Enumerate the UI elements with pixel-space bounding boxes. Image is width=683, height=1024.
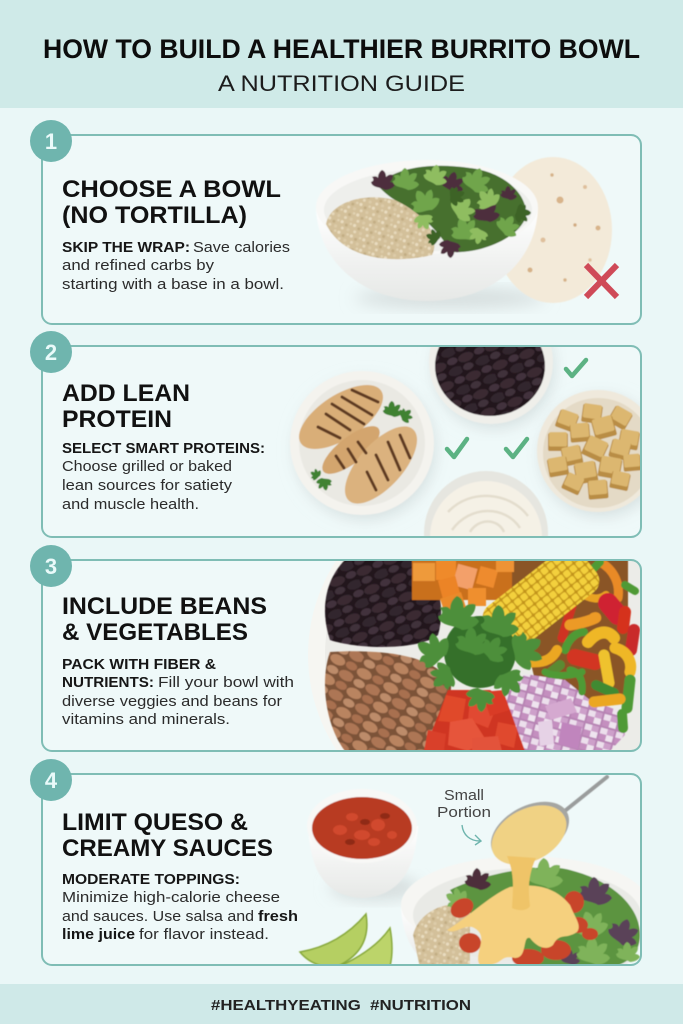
sour cream bowl (424, 471, 548, 536)
red x mark (586, 265, 617, 297)
panel 1: choose a bowl (30, 120, 641, 324)
cilantro (444, 616, 516, 688)
small portion label (438, 789, 490, 817)
heading 3: & VEGETABLES (62, 619, 248, 646)
heading 4 (62, 809, 273, 862)
white bowl (316, 160, 538, 301)
queso pool (447, 886, 579, 965)
badge 2 (30, 331, 72, 373)
heading 4: LIMIT QUESO & (62, 809, 248, 836)
body text 3: PACK WITH FIBER & (62, 657, 217, 673)
heading 3: INCLUDE BEANS (62, 593, 267, 620)
illustration: salsa, lime, queso bowl (300, 777, 649, 970)
body text 1: SKIP THE WRAP: (62, 240, 190, 256)
heading 1: CHOOSE A BOWL (62, 176, 281, 203)
badge 4 (30, 759, 72, 801)
body text 1: Save calories (193, 240, 290, 256)
heading 2: ADD LEAN (62, 380, 190, 407)
body text 1: and refined carbs by (62, 258, 215, 274)
badge 4: 4 (45, 768, 58, 793)
badge 3 (30, 545, 72, 587)
body text 3 (62, 657, 294, 728)
body text 3: Fill your bowl with (158, 675, 294, 691)
body text 2 (62, 441, 265, 513)
salsa ramekin (307, 789, 420, 900)
black beans (325, 560, 441, 647)
body text 3: NUTRIENTS: (62, 675, 154, 691)
body text 1: starting with a base in a bowl. (62, 277, 284, 293)
badge 1: 1 (45, 129, 57, 154)
salad greens (378, 166, 526, 252)
lime wedges (300, 914, 392, 966)
body text 4: for flavor instead. (139, 927, 269, 943)
heading 1 (62, 176, 281, 229)
illustration: protein plates (290, 347, 640, 536)
spoon handle (566, 777, 607, 810)
black bean bowl (428, 347, 558, 432)
badge 2: 2 (45, 340, 57, 365)
hashtags: #HEALTHYEATING #NUTRITION (211, 997, 471, 1014)
illustration: loaded vegetable bowl (324, 561, 640, 750)
heading 2 (62, 380, 190, 433)
illustration: bowl and tortilla (316, 157, 617, 308)
panel 2: add lean protein (30, 331, 642, 538)
heading 3 (62, 593, 267, 646)
body text 4 (62, 872, 298, 943)
body text 3: diverse veggies and beans for (62, 694, 282, 710)
bowl greens (450, 868, 640, 968)
queso bowl (401, 777, 649, 970)
body text 4: fresh (258, 909, 298, 925)
tofu bowl (536, 390, 640, 520)
body text 2: lean sources for satiety (62, 478, 233, 494)
subtitle: A NUTRITION GUIDE (218, 71, 465, 96)
bowl rice (413, 904, 470, 968)
tortilla (494, 157, 612, 303)
small portion label: Portion (437, 805, 491, 821)
footer band (0, 984, 683, 1024)
heading 4: CREAMY SAUCES (62, 835, 273, 862)
pinto beans (325, 651, 451, 751)
heading 1: (NO TORTILLA) (62, 202, 247, 229)
body text 1 (62, 240, 290, 293)
tomatoes (447, 891, 598, 967)
body text 4: Minimize high-calorie cheese (62, 890, 280, 906)
heading 2: PROTEIN (62, 406, 172, 433)
body text 2: Choose grilled or baked (62, 459, 232, 475)
title: HOW TO BUILD A HEALTHIER BURRITO BOWL (43, 34, 640, 64)
panel 3: beans and vegetables (30, 545, 642, 752)
onions (505, 674, 625, 751)
chicken plate (289, 371, 435, 519)
peppers base (505, 560, 628, 700)
squash cubes (412, 560, 512, 600)
header band (0, 0, 683, 108)
rice (326, 197, 434, 259)
body text 4: MODERATE TOPPINGS: (62, 872, 240, 888)
small portion label: Small (444, 788, 484, 804)
body text 2: and muscle health. (62, 497, 199, 513)
check marks (447, 360, 586, 457)
corn cob (482, 561, 600, 641)
queso drip (507, 856, 536, 910)
tomatoes (432, 689, 526, 750)
body text 2: SELECT SMART PROTEINS: (62, 441, 265, 457)
pepper strips (528, 562, 635, 728)
small portion arrow (462, 825, 481, 845)
badge 3: 3 (45, 554, 57, 579)
body text 4: and sauces. Use salsa and (62, 909, 254, 925)
badge 1 (30, 120, 72, 162)
body text 3: vitamins and minerals. (62, 712, 230, 728)
panel 4: limit queso and sauces (30, 759, 649, 970)
body text 4: lime juice (62, 927, 135, 943)
